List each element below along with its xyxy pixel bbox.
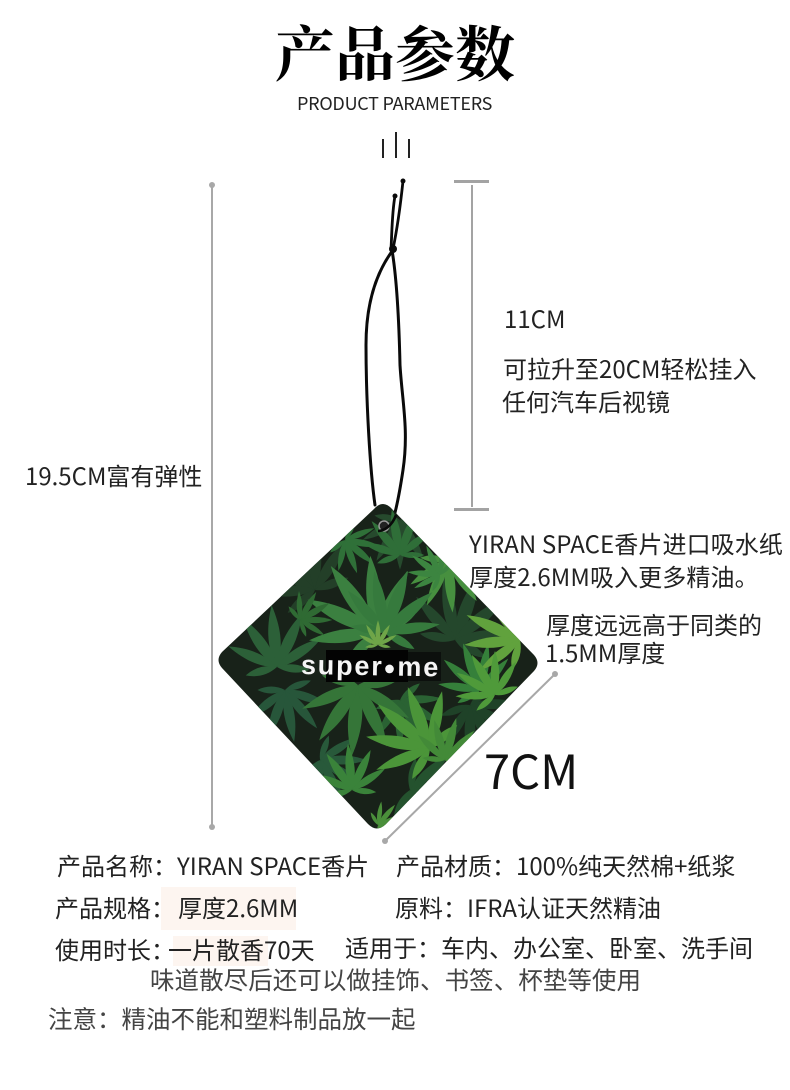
leaves bright foreground [288,510,521,828]
subtitle: PRODUCT PARAMETERS [297,90,492,116]
spec: product name: 产品名称：YIRAN SPACE香片 [57,847,369,882]
spec: product material: 产品材质：100%纯天然棉+纸浆 [396,847,735,882]
label: total height: 19.5CM富有弹性 [25,457,202,492]
text: paper note: 厚度2.6MM吸入更多精油。 [469,558,759,593]
spec: suitable places: 适用于：车内、办公室、卧室、洗手间 [345,929,753,964]
text: paper note [469,525,783,593]
leaves dark background [228,514,506,816]
text: caution: 注意：精油不能和塑料制品放一起 [48,1001,416,1036]
highlight: thickness background [161,887,296,930]
text: stretch note: 可拉升至20CM轻松挂入 [503,350,756,385]
dimension line: card side [382,671,558,844]
text: other uses: 味道散尽后还可以做挂饰、书签、杯垫等使用 [150,962,641,997]
label: string length: 11CM [504,300,565,335]
title: 产品参数 [275,8,515,94]
spec: duration: 使用时长：一片散香70天 [55,931,315,966]
card logo text: super●me [301,650,440,682]
dimension line: string length [454,180,489,511]
card grommet [379,521,389,531]
icon: three tick marks [382,132,410,158]
spec: raw material: 原料：IFRA认证天然精油 [395,889,661,924]
text: thickness comparison [545,606,762,669]
text: stretch note: 任何汽车后视镜 [502,383,670,418]
illustration: dimension lines and air freshener [209,132,558,844]
text: stretch note [502,350,756,418]
dimension line: full height [209,182,215,830]
spec: product size: 产品规格：厚度2.6MM [55,889,298,924]
highlight: duration background [173,936,268,966]
logo backing [408,652,441,681]
text: thickness comparison: 1.5MM厚度 [545,634,665,669]
text: thickness comparison: 厚度远远高于同类的 [546,606,762,641]
air freshener card [218,504,538,828]
hanging string [366,178,406,520]
label: card side: 7CM [484,734,578,803]
text: paper note: YIRAN SPACE香片进口吸水纸 [469,525,783,560]
